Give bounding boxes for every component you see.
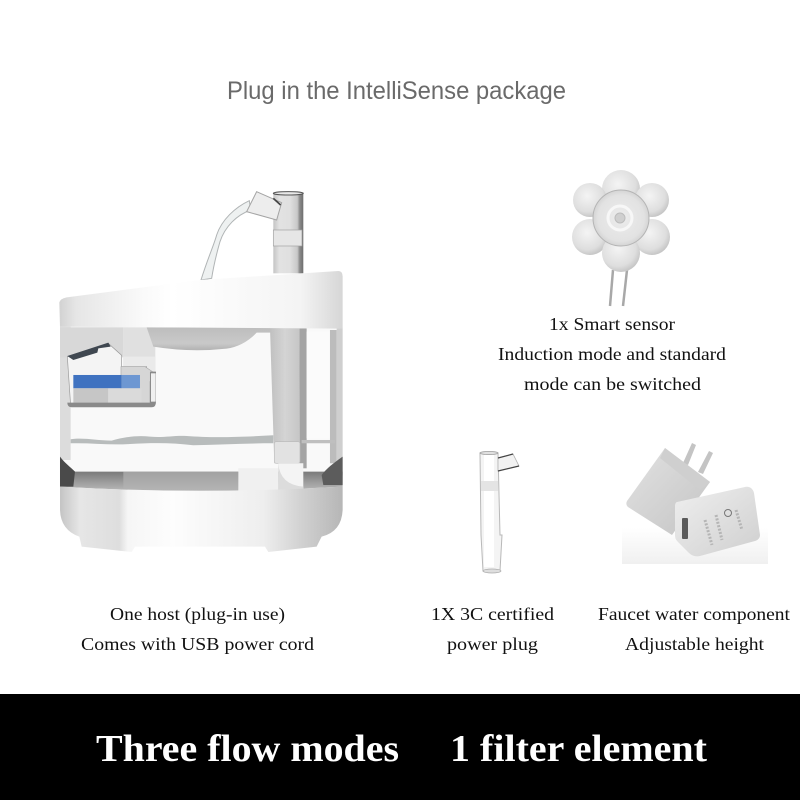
host caption xyxy=(81,604,314,654)
icon: smart sensor xyxy=(572,170,670,306)
icon: USB power adapters xyxy=(622,443,768,564)
footer banner: 1 filter element xyxy=(450,728,707,770)
lid xyxy=(59,271,343,329)
plug caption xyxy=(431,604,554,654)
faucet caption xyxy=(598,604,790,654)
glass reservoir xyxy=(60,327,343,492)
sensor caption: 1x Smart sensor xyxy=(549,314,675,334)
base xyxy=(60,487,343,552)
central pipe xyxy=(270,327,300,463)
host caption: Comes with USB power cord xyxy=(81,634,314,654)
water stream xyxy=(201,201,251,280)
water line xyxy=(71,435,273,445)
faucet caption: Adjustable height xyxy=(625,634,764,654)
icon: water fountain host xyxy=(59,192,343,552)
filter cartridge xyxy=(67,343,156,407)
host caption: One host (plug-in use) xyxy=(110,604,285,624)
sensor wires xyxy=(610,270,627,306)
floor xyxy=(60,472,343,491)
footer banner xyxy=(0,694,800,800)
bowl under lid xyxy=(147,327,272,350)
title: Plug in the IntelliSense package xyxy=(227,77,566,105)
tank corner details xyxy=(60,457,75,487)
sensor caption: mode can be switched xyxy=(524,374,701,394)
plug caption: power plug xyxy=(447,634,538,654)
sensor caption xyxy=(498,314,726,394)
icon: faucet water component xyxy=(480,452,519,573)
faucet caption: Faucet water component xyxy=(598,604,790,624)
sensor caption: Induction mode and standard xyxy=(498,344,726,364)
faucet tube xyxy=(247,192,303,273)
plug caption: 1X 3C certified xyxy=(431,604,554,624)
footer banner: Three flow modes xyxy=(96,728,399,770)
